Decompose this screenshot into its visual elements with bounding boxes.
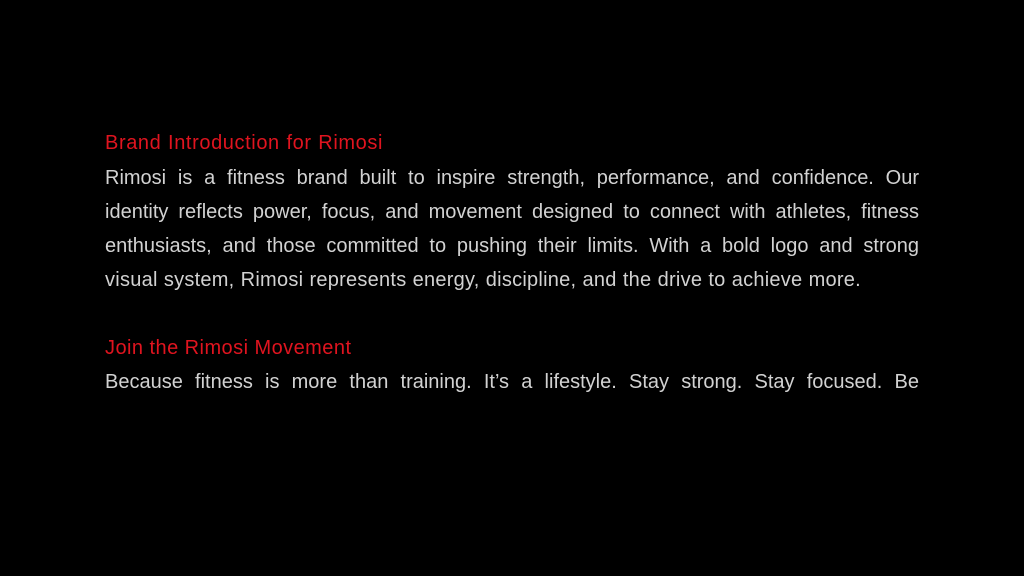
body line 1: Rimosi is a fitness brand built to inspire strength, performance, and confidence. Our <box>105 167 919 189</box>
heading: Join the Rimosi Movement: Join the Rimosi Movement <box>105 337 351 359</box>
body line 5: Because fitness is more than training. It’s a lifestyle. Stay strong. Stay focused. Be <box>105 371 919 393</box>
body line 3: enthusiasts, and those committed to pushing their limits. With a bold logo and strong <box>105 235 919 257</box>
text block: join the movement <box>105 337 919 393</box>
body line 2: identity reflects power, focus, and movement designed to connect with athletes, fitness <box>105 201 919 223</box>
text block: brand introduction <box>105 132 919 291</box>
heading: Brand Introduction for Rimosi: Brand Introduction for Rimosi <box>105 132 383 154</box>
body line 4: visual system, Rimosi represents energy, discipline, and the drive to achieve more. <box>105 269 861 291</box>
